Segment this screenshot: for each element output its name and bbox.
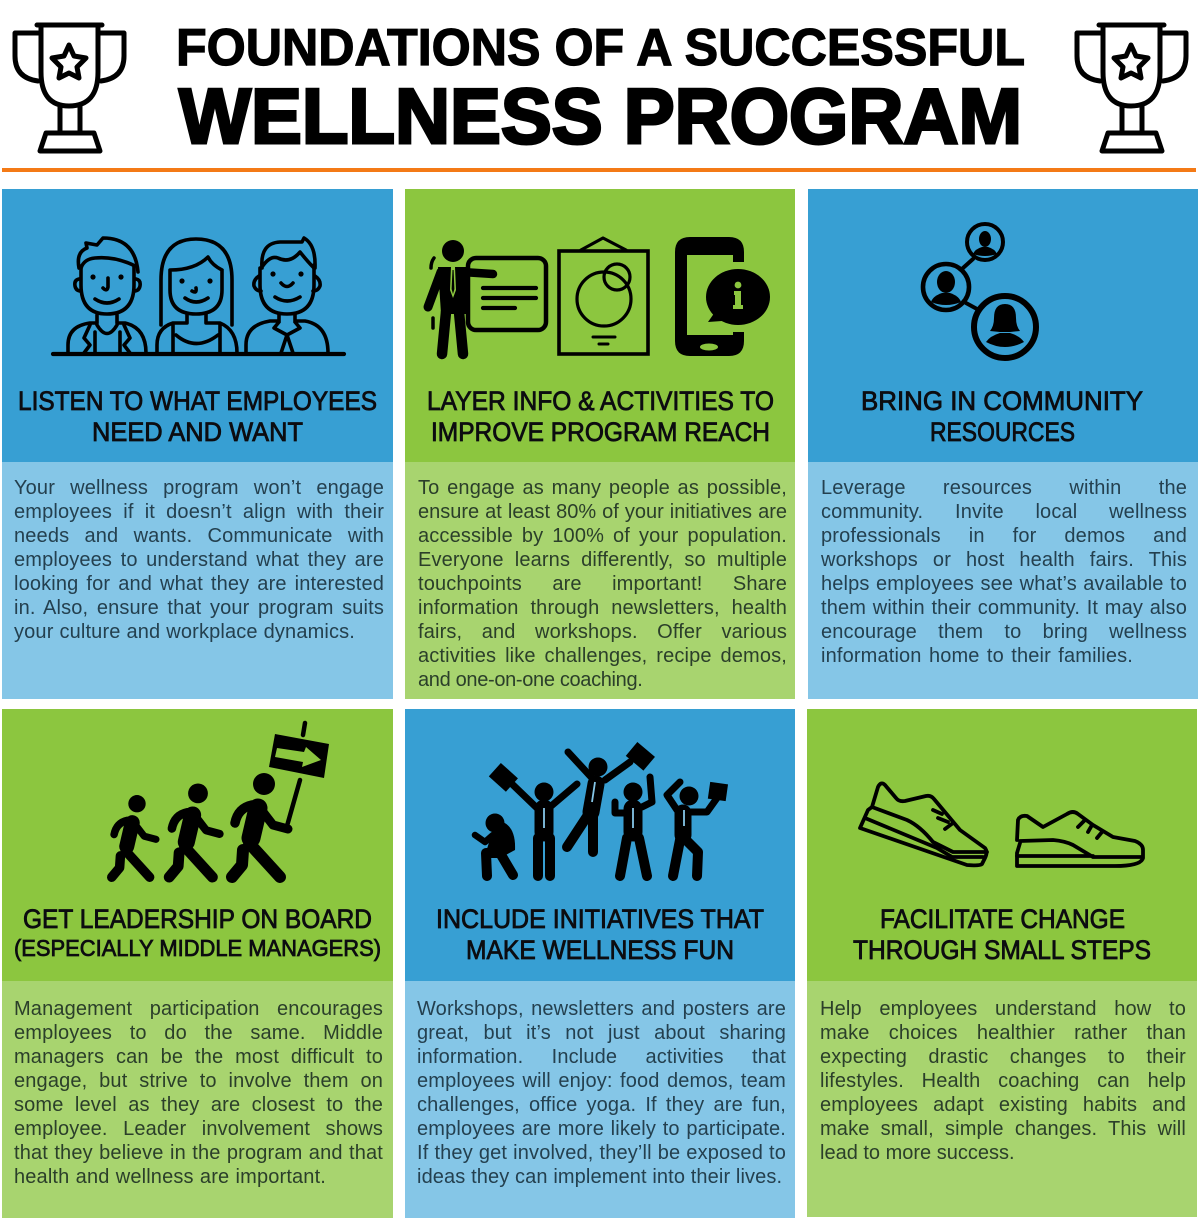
text block: professionals in for demos and [821, 525, 1187, 547]
heading: BRING IN COMMUNITY [861, 386, 1143, 416]
text block: ideas they can implement into their lives. [417, 1166, 782, 1188]
text block: employees to understand what they are [14, 549, 384, 571]
icon: left trophy [15, 25, 124, 151]
text block [807, 981, 1197, 1217]
text block [2, 981, 393, 1218]
heading [427, 386, 774, 447]
heading [436, 904, 764, 965]
text block [2, 462, 393, 699]
text block: expecting drastic changes to their [820, 1046, 1186, 1068]
heading [861, 386, 1143, 447]
text block: lifestyles. Health coaching can help [820, 1070, 1186, 1092]
icon: celebrating office workers [475, 742, 728, 876]
text block: challenges, office yoga. If they are fun, [417, 1094, 786, 1116]
text block: helps employees see what’s available to [821, 573, 1187, 595]
title [176, 19, 1025, 160]
text block: looking for and what they are interested [14, 573, 384, 595]
text block: employees to do the same. Middle [14, 1022, 383, 1044]
text block [808, 462, 1198, 699]
header banner [2, 19, 1196, 172]
heading [18, 386, 377, 447]
text block: If they get involved, they’ll be exposed to [417, 1142, 786, 1164]
text block: make choices healthier rather than [820, 1022, 1186, 1044]
icon: right trophy [1077, 25, 1186, 151]
title: FOUNDATIONS OF A SUCCESSFUL [176, 19, 1025, 77]
heading: RESOURCES [930, 417, 1075, 447]
text block: Everyone learns differently, so multiple [418, 549, 787, 571]
panel: small steps [807, 709, 1197, 1217]
text block: needs and wants. Communicate with [14, 525, 384, 547]
text block: employees if it doesn’t align with their [14, 501, 384, 523]
text block: them within their community. It may also [821, 597, 1187, 619]
text block: Help employees understand how to [820, 998, 1186, 1020]
text block: encourage them to bring wellness [821, 621, 1187, 643]
panel: community resources [808, 189, 1198, 699]
icon: three employees [53, 238, 344, 354]
title: WELLNESS PROGRAM [179, 72, 1022, 160]
heading [14, 904, 381, 961]
text block: Workshops, newsletters and posters are [417, 998, 786, 1020]
text block: health and wellness are important. [14, 1166, 326, 1188]
heading [853, 904, 1151, 965]
text block: ensure at least 80% of your initiatives are [418, 501, 787, 523]
text block: Management participation encourages [14, 998, 383, 1020]
heading: INCLUDE INITIATIVES THAT [436, 904, 764, 934]
text block: employees adapt existing habits and [820, 1094, 1186, 1116]
text block: Leverage resources within the [821, 477, 1187, 499]
heading: NEED AND WANT [92, 417, 303, 447]
text block: make small, simple changes. This will [820, 1118, 1186, 1140]
heading: GET LEADERSHIP ON BOARD [23, 904, 372, 934]
text block: community. Invite local wellness [821, 501, 1187, 523]
text block: engage, but strive to involve them on [14, 1070, 383, 1092]
icon: presenter, poster and phone [428, 237, 770, 356]
panel: listen to employees [2, 189, 393, 699]
icon: connected people network [923, 224, 1036, 358]
text block: great, but it’s not just about sharing [417, 1022, 786, 1044]
text block: in. Also, ensure that your program suits [14, 597, 384, 619]
icon: two sneakers [860, 783, 1143, 866]
heading: FACILITATE CHANGE [880, 904, 1125, 934]
text block: touchpoints are important! Share [418, 573, 787, 595]
panel: layer info and activities [405, 189, 795, 699]
text block: Your wellness program won’t engage [14, 477, 384, 499]
text block: employee. Leader involvement shows [14, 1118, 383, 1140]
text block: your culture and workplace dynamics. [14, 621, 355, 643]
text block: information. Include activities that [417, 1046, 786, 1068]
text block: information home to their families. [821, 645, 1133, 667]
text block: activities like challenges, recipe demos, [418, 645, 787, 667]
heading: IMPROVE PROGRAM REACH [431, 417, 770, 447]
text block: accessible by 100% of your population. [418, 525, 787, 547]
text block [405, 462, 795, 699]
text block: workshops or host health fairs. This [821, 549, 1187, 571]
text block: lead to more success. [820, 1142, 1015, 1164]
text block: and one-on-one coaching. [418, 669, 642, 691]
heading: THROUGH SMALL STEPS [853, 935, 1151, 965]
panel: leadership on board [2, 709, 393, 1218]
heading: LAYER INFO & ACTIVITIES TO [427, 386, 774, 416]
text block [405, 981, 795, 1218]
text block: employees are more likely to participate. [417, 1118, 786, 1140]
text block: managers can be the most difficult to [14, 1046, 383, 1068]
text block: fairs, and workshops. Offer various [418, 621, 787, 643]
text block: some level as they are closest to the [14, 1094, 383, 1116]
text block: information through newsletters, health [418, 597, 787, 619]
panel: make wellness fun [405, 709, 795, 1218]
text block: that they believe in the program and that [14, 1142, 383, 1164]
text block: employees will enjoy: food demos, team [417, 1070, 786, 1092]
text block: To engage as many people as possible, [418, 477, 787, 499]
heading: MAKE WELLNESS FUN [466, 935, 734, 965]
icon: walkers following a sign [112, 723, 329, 877]
